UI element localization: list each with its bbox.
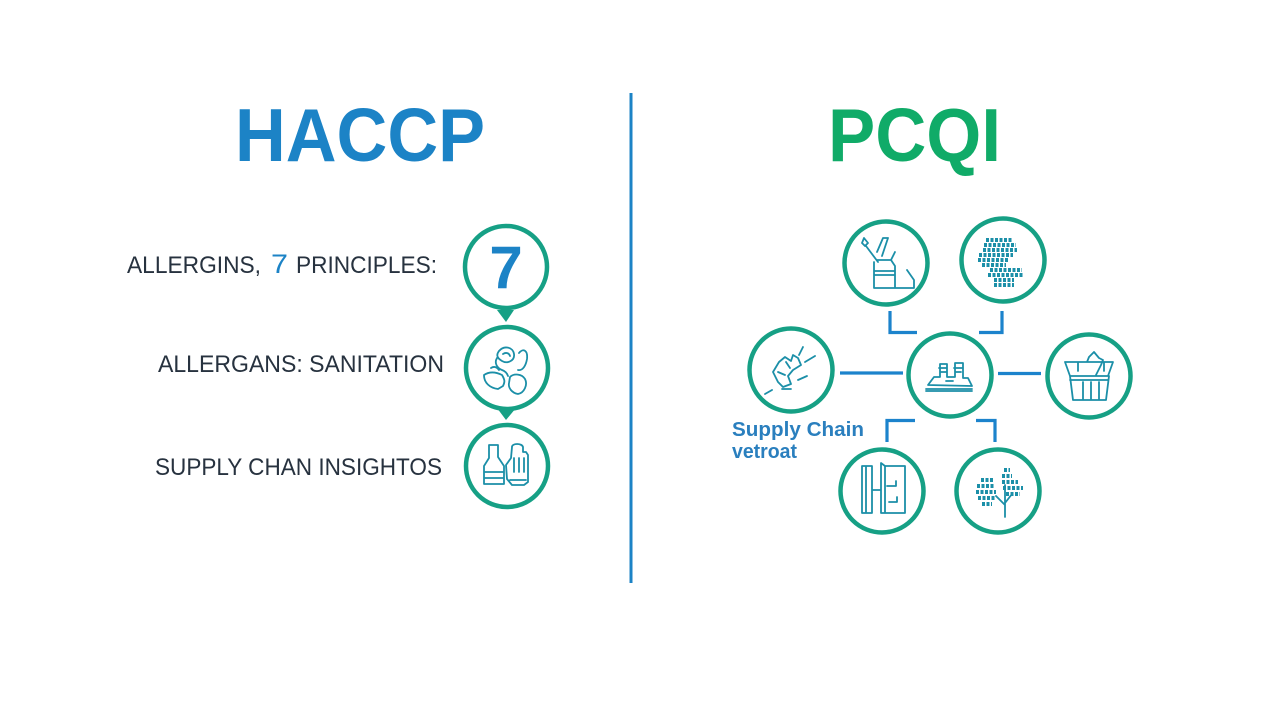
label: supply chain: Supply Chain (732, 419, 864, 441)
title: PCQI: PCQI (828, 93, 1001, 177)
label: supply chain insights: SUPPLY CHAN INSIGHTOS (155, 454, 442, 481)
title: HACCP: HACCP (235, 93, 485, 177)
connector pointer: second to third (497, 408, 516, 420)
icon: central factory (908, 334, 992, 416)
label: allergins 7 principles: ALLERGINS, (127, 252, 261, 279)
label: supply chain (732, 419, 864, 463)
label: allergins 7 principles (127, 249, 437, 279)
icon: plant (956, 450, 1040, 532)
connector pointer: first to second (497, 310, 514, 322)
icon: crumbs (750, 328, 832, 412)
icon: allergens (466, 327, 548, 409)
icon: bottle and tools (844, 222, 928, 304)
label: supply chain: vetroat (732, 441, 797, 463)
panel: HACCP list (127, 226, 548, 507)
panel: PCQI network (732, 218, 1130, 532)
icon: basket (1048, 334, 1130, 418)
label: allergans sanitation: ALLERGANS: SANITATION (158, 351, 444, 378)
icon: grains top (962, 218, 1044, 302)
vertical divider (630, 93, 632, 583)
icon: document (840, 450, 924, 532)
icon: bottles (466, 425, 548, 507)
icon: number 7 circle (465, 226, 547, 308)
connectors (840, 311, 1041, 442)
label: allergins 7 principles: PRINCIPLES: (296, 252, 437, 279)
icon: number 7 circle: 7 (489, 234, 523, 301)
label: allergins 7 principles: 7 (271, 249, 288, 279)
